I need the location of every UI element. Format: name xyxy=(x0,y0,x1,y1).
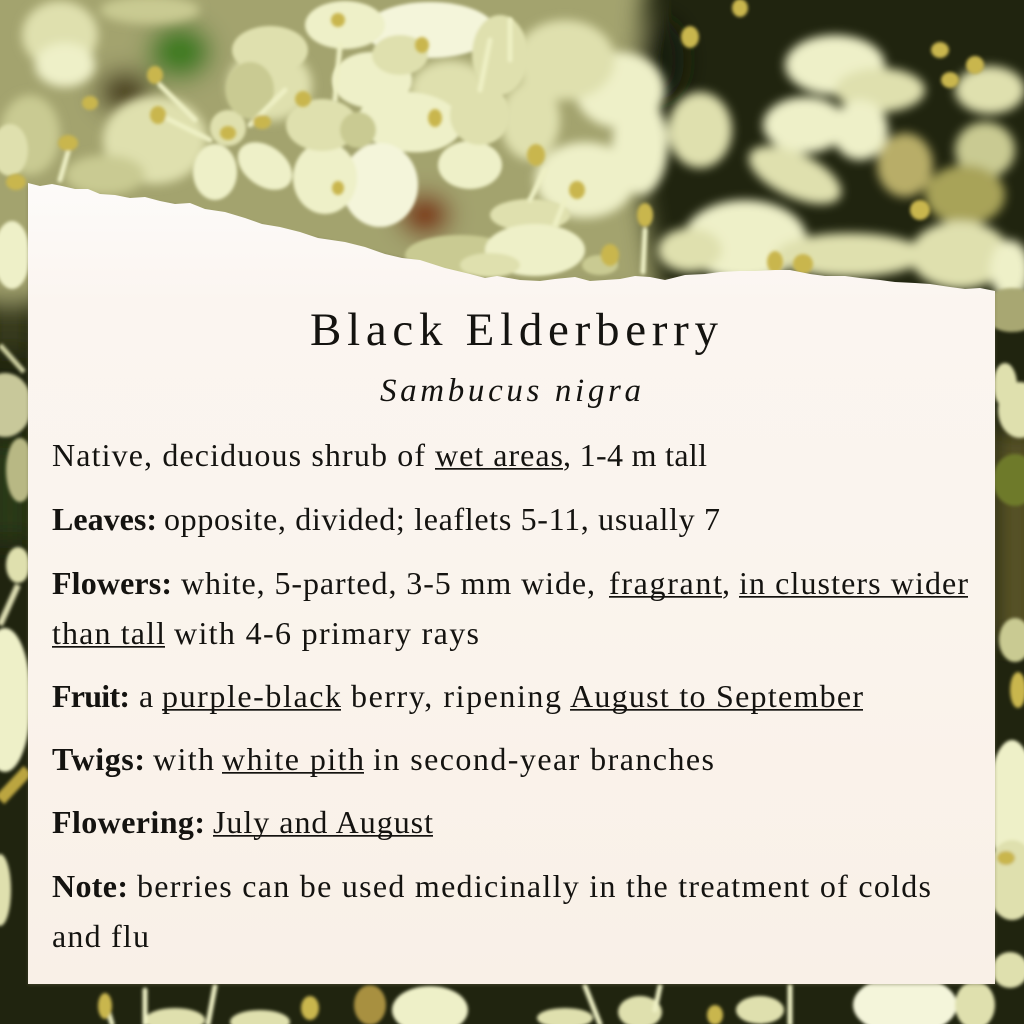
text block: twigs: Twigs: xyxy=(52,741,145,777)
stamens xyxy=(6,0,984,274)
text block: twigs: white pith xyxy=(222,741,364,777)
left strip flowers xyxy=(0,345,34,926)
soft base tones xyxy=(0,0,1024,640)
bottom strip flowers xyxy=(98,975,995,1024)
text block: note xyxy=(52,868,931,954)
text block: flowers: , xyxy=(722,565,730,601)
text block: note: Note: xyxy=(52,868,128,904)
text block: description: wet areas xyxy=(435,437,563,473)
text block: fruit xyxy=(52,678,863,714)
text block: flowers: with 4-6 primary rays xyxy=(174,615,479,651)
text block: note: berries can be used medicinally in the treatment of colds xyxy=(137,868,931,904)
text block: fruit: purple-black xyxy=(162,678,341,714)
text block: twigs: with xyxy=(153,741,214,777)
text block: twigs: in second-year branches xyxy=(373,741,714,777)
text block: leaves: Leaves: xyxy=(52,501,157,537)
text block: leaves: opposite, divided; leaflets 5-11, usually 7 xyxy=(164,501,720,537)
sharp flowers, upper left xyxy=(0,1,618,289)
text block: description: Native, deciduous shrub of xyxy=(52,437,425,473)
right strip flowers xyxy=(982,288,1024,988)
text block: flowers: white, 5-parted, 3-5 mm wide, xyxy=(181,565,595,601)
blurred flowers, upper right xyxy=(0,0,1024,300)
text block: flowers: than tall xyxy=(52,615,165,651)
text block: flowering: July and August xyxy=(213,804,433,840)
text block: twigs xyxy=(52,741,714,777)
text block: fruit: August to September xyxy=(570,678,863,714)
text block: fruit: berry, ripening xyxy=(351,678,561,714)
text block: flowers: fragrant xyxy=(609,565,722,601)
text block: description xyxy=(52,437,707,473)
text block: flowers: Flowers: xyxy=(52,565,172,601)
text block: description: , 1-4 m tall xyxy=(563,437,707,473)
subtitle: scientific name: Sambucus nigra xyxy=(380,373,641,409)
text block: flowering xyxy=(52,804,433,840)
title: Black Elderberry xyxy=(310,304,718,356)
text block: flowers: in clusters wider xyxy=(739,565,968,601)
text block: flowers xyxy=(52,565,968,651)
text block: note: and flu xyxy=(52,918,149,954)
text block: flowering: Flowering: xyxy=(52,804,205,840)
text block: fruit: Fruit: xyxy=(52,678,130,714)
text block: fruit: a xyxy=(139,678,153,714)
panel: torn paper card xyxy=(28,183,995,985)
